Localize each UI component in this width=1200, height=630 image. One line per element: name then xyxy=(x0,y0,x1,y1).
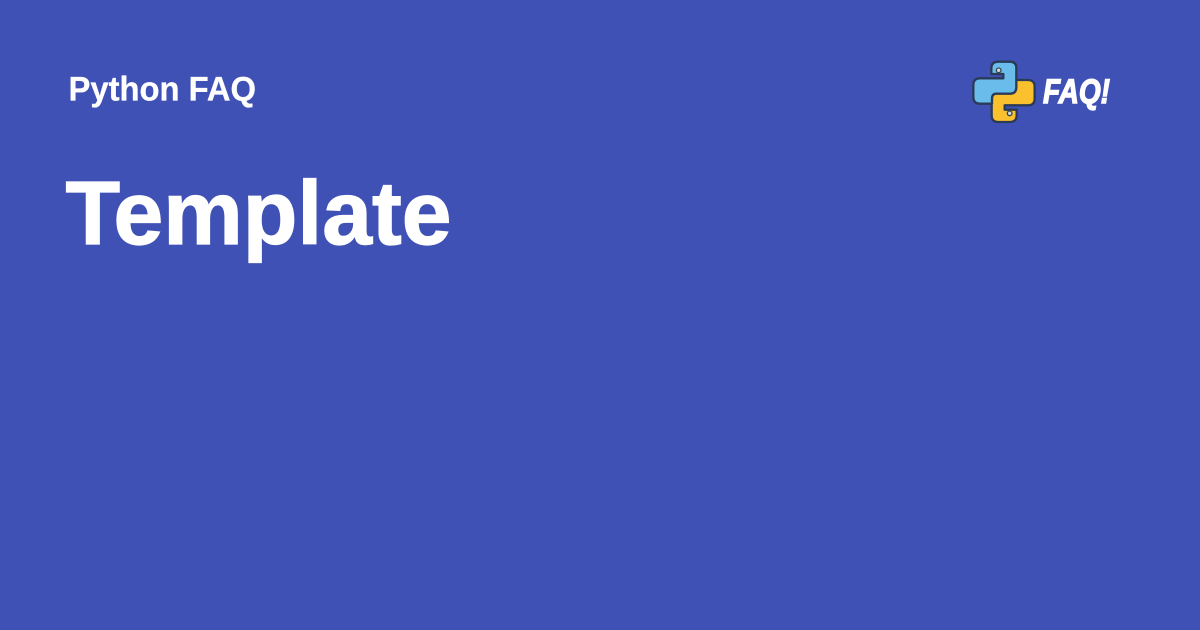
icon: python logo xyxy=(973,62,1035,122)
logo wordmark: FAQ! xyxy=(1043,73,1110,111)
page title: Template xyxy=(66,164,452,264)
icon: yellow snake xyxy=(992,80,1035,122)
icon: blue snake xyxy=(973,62,1016,104)
site name heading: Python FAQ xyxy=(68,70,256,108)
logo: Python FAQ xyxy=(973,62,1110,122)
